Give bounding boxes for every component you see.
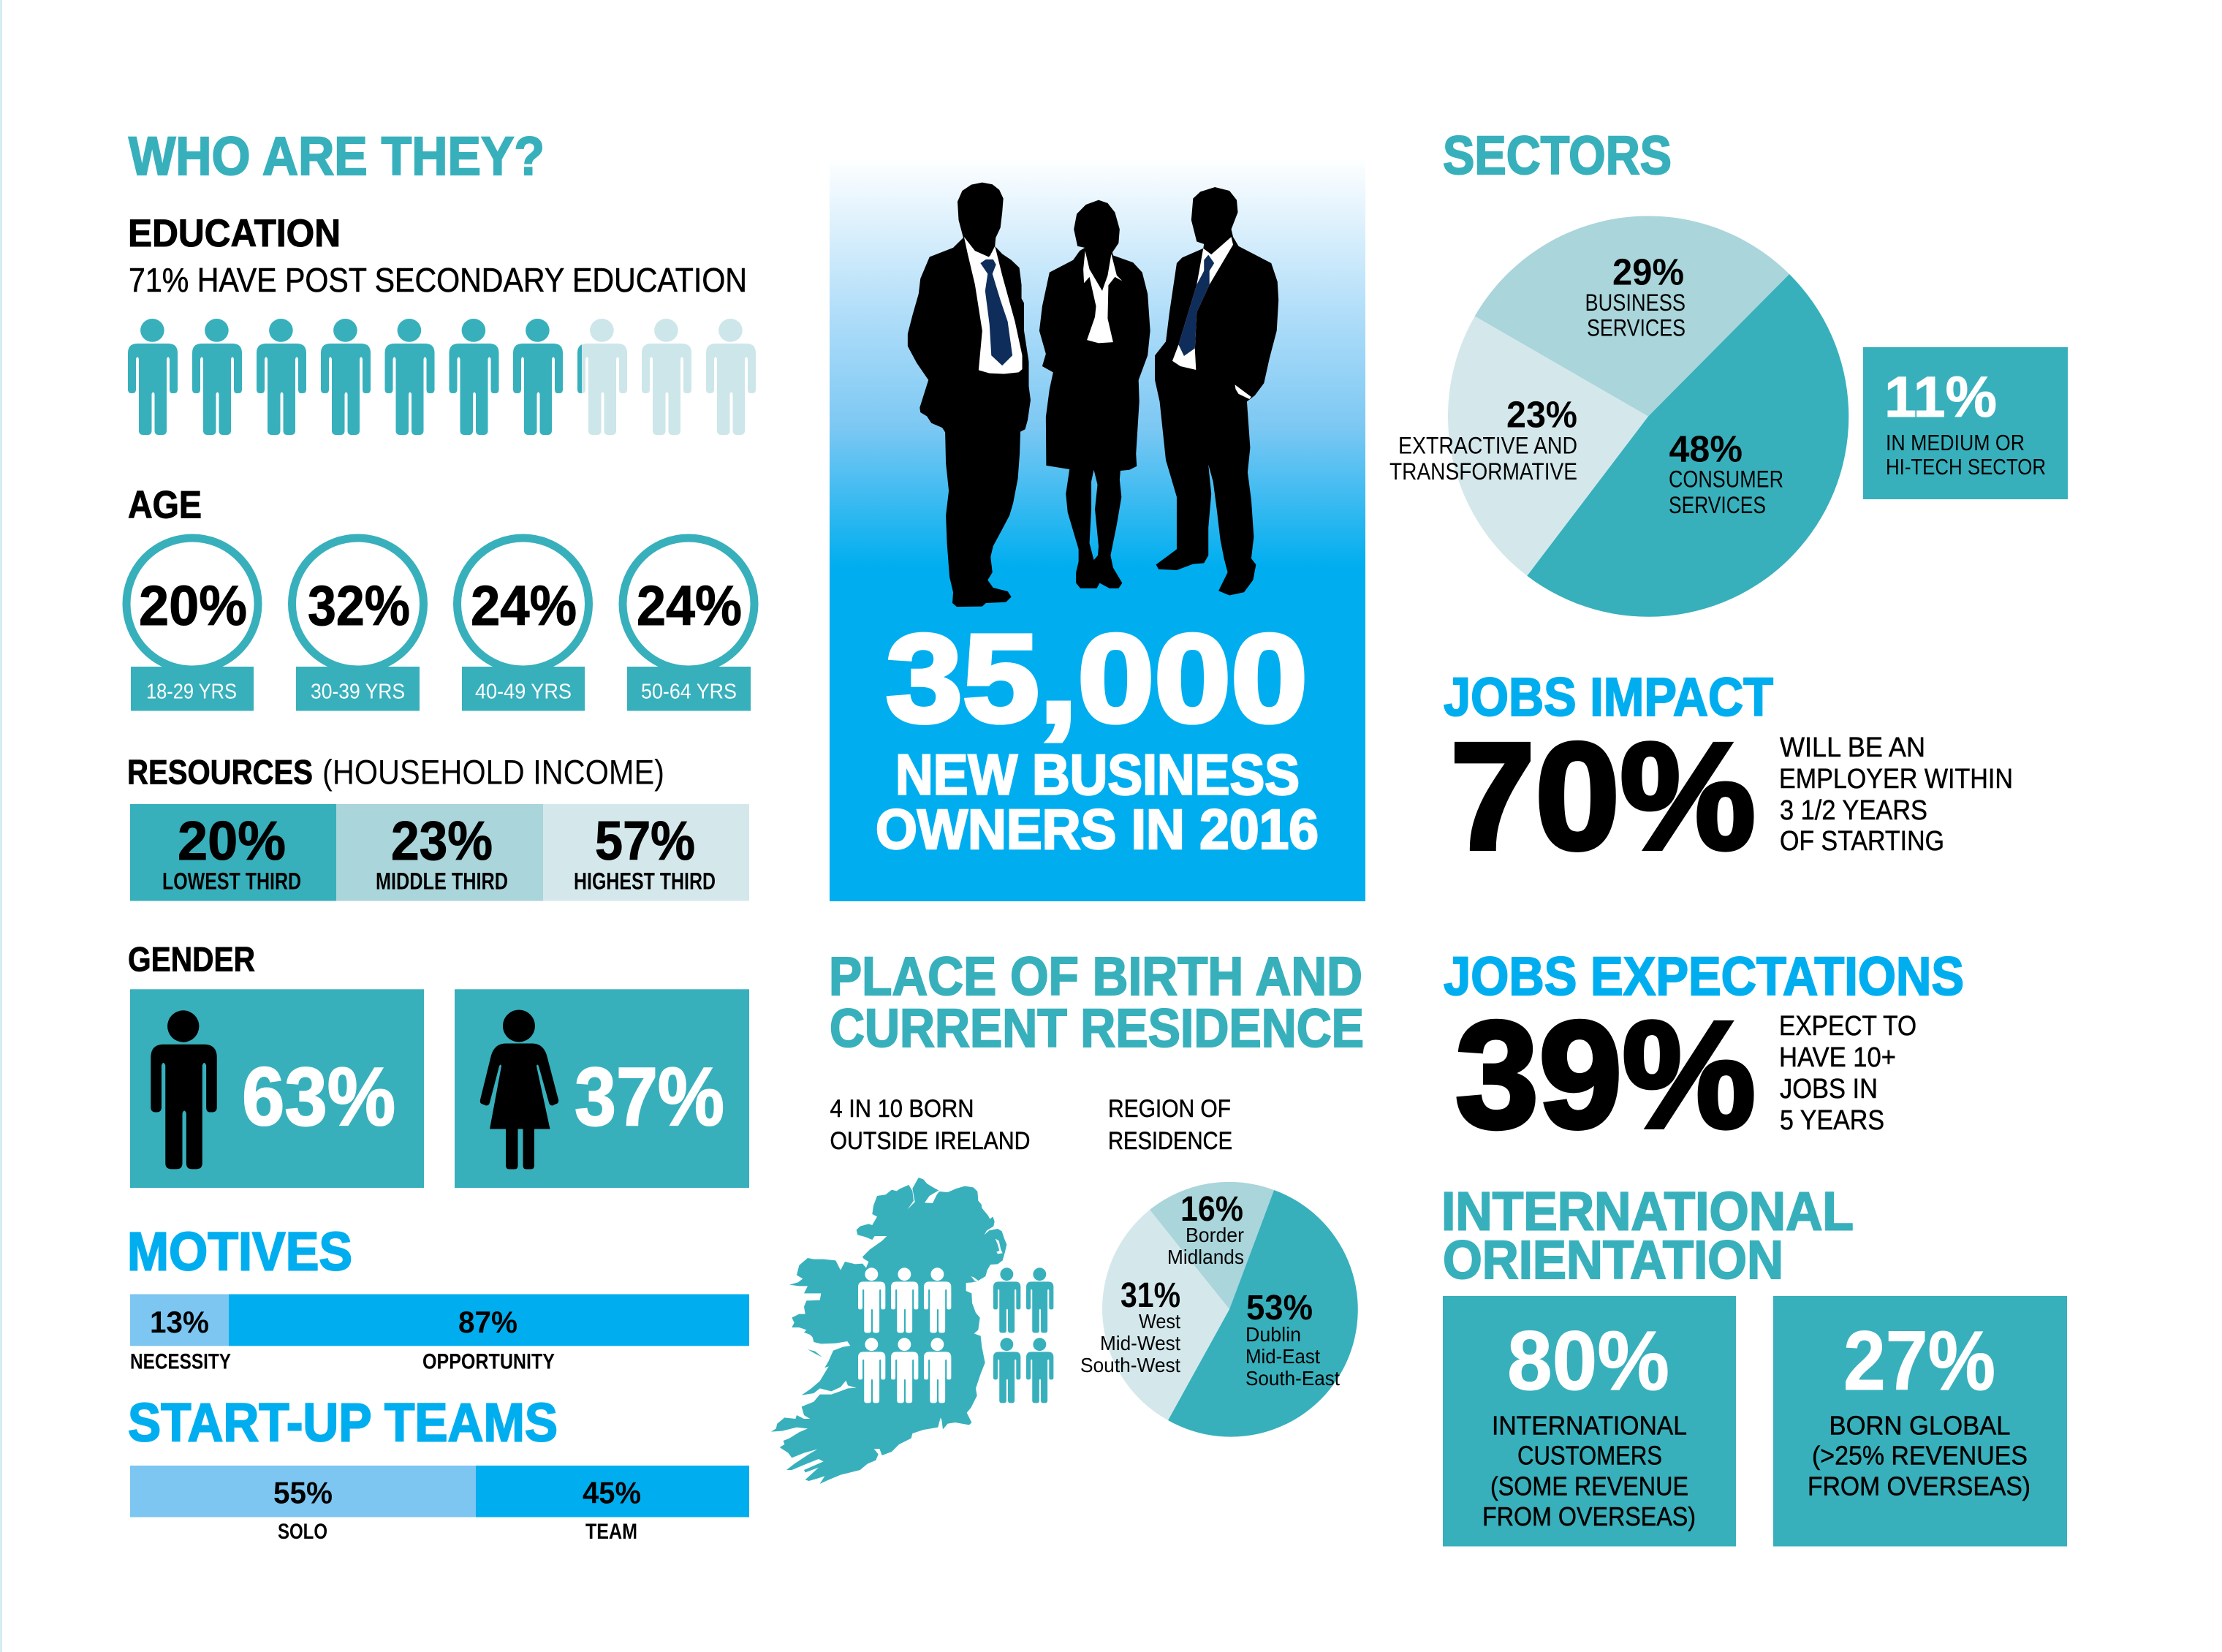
heading: start-up teams: START-UP TEAMS (128, 1392, 558, 1453)
heading: orientation: ORIENTATION (1443, 1229, 1783, 1290)
bar: team: TEAM (585, 1520, 637, 1544)
text: expect to have: JOBS IN (1780, 1074, 1878, 1105)
chart: sectors pie (1389, 216, 1848, 617)
age group 18-29: 18-29 YRS (146, 680, 237, 703)
label: extractive and transformative: TRANSFORMATIVE (1389, 458, 1577, 485)
bar: solo: 55% (273, 1475, 333, 1510)
text: employer within (1779, 732, 2013, 857)
callout: medium or hi-tech: IN MEDIUM OR (1886, 430, 2025, 455)
card: international customers: (SOME REVENUE (1490, 1471, 1688, 1501)
label: 16 percent (1167, 1190, 1244, 1268)
bar: team (476, 1466, 749, 1544)
label: consumer services (1669, 428, 1783, 518)
text: region of residence: RESIDENCE (1108, 1127, 1232, 1155)
panel: age (126, 484, 754, 711)
label: consumer services: SERVICES (1669, 492, 1766, 518)
icons: people born in ireland (858, 1268, 951, 1403)
card: international customers: CUSTOMERS (1517, 1440, 1662, 1471)
heading: resources: RESOURCES (127, 753, 313, 791)
text: expect to have: 5 YEARS (1780, 1105, 1884, 1136)
segment: highest third (543, 804, 749, 901)
illustration: three business people (908, 183, 1278, 607)
callout: medium or hi-tech: HI-TECH SECTOR (1886, 454, 2046, 480)
panel: resources (127, 753, 749, 901)
age group 50-64: 24% (637, 575, 742, 637)
text: region of residence (1108, 1095, 1232, 1155)
heading: household income: (HOUSEHOLD INCOME) (322, 753, 664, 791)
text: employer within: WILL BE AN (1780, 732, 1925, 763)
segment: middle third (336, 804, 543, 901)
label: 31 percent: South-West (1080, 1354, 1180, 1376)
icon: man (151, 1010, 217, 1169)
text: region of residence: REGION OF (1108, 1095, 1231, 1123)
panel: hero (830, 157, 1365, 901)
panel: education (128, 212, 756, 435)
text: employer within: EMPLOYER WITHIN (1779, 764, 2013, 795)
panel: place of birth and residence (771, 946, 1364, 1484)
icons: ten people, 71 percent filled (128, 319, 756, 435)
text: born outside: OUTSIDE IRELAND (830, 1127, 1031, 1155)
card: born global: 27% (1843, 1314, 1995, 1408)
text: born outside (830, 1095, 1031, 1155)
age group 50-64: 50-64 YRS (641, 680, 737, 703)
label: business services: 29% (1612, 251, 1684, 292)
figure: right man (1155, 187, 1278, 596)
card: female: 37% (575, 1050, 724, 1143)
bar: necessity: NECESSITY (130, 1349, 231, 1374)
segment: lowest third (130, 804, 336, 901)
label: business services: SERVICES (1587, 314, 1686, 341)
panel: jobs expectations (1444, 946, 1964, 1160)
segment: middle third: MIDDLE THIRD (376, 868, 508, 895)
card: born global: (>25% REVENUES (1812, 1440, 2028, 1471)
text: born outside: 4 IN 10 BORN (830, 1095, 974, 1123)
label: 53 percent: Dublin (1245, 1323, 1301, 1346)
heading: sectors: SECTORS (1443, 125, 1672, 186)
label: business services (1585, 251, 1686, 341)
big number: 70 percent: 70% (1450, 712, 1756, 882)
segment: lowest third: LOWEST THIRD (162, 868, 301, 895)
label: 53 percent: South-East (1245, 1367, 1340, 1390)
label: consumer services: 48% (1669, 428, 1743, 469)
age group 40-49: 24% (471, 575, 577, 637)
age group 18-29: 20% (139, 575, 247, 637)
text: employer within: OF STARTING (1780, 826, 1944, 857)
bar: solo: SOLO (278, 1520, 327, 1544)
age group 40-49 (458, 538, 589, 711)
segment: highest third: HIGHEST THIRD (574, 868, 716, 895)
bar: solo (130, 1466, 476, 1544)
card: born global (1773, 1296, 2067, 1547)
label: extractive and transformative: 23% (1506, 393, 1577, 436)
callout: medium or hi-tech: 11% (1884, 364, 1997, 429)
text: employer within: 3 1/2 YEARS (1780, 795, 1927, 826)
bar: opportunity: OPPORTUNITY (422, 1349, 555, 1374)
label: extractive and transformative: EXTRACTIVE AND (1398, 433, 1577, 459)
heading: motives: MOTIVES (127, 1221, 352, 1282)
card: international customers: FROM OVERSEAS) (1482, 1501, 1696, 1531)
card: born global: FROM OVERSEAS) (1808, 1471, 2030, 1501)
segment: highest third: 57% (595, 810, 695, 871)
panel: motives (127, 1221, 749, 1374)
bar: team: 45% (583, 1475, 641, 1510)
callout: medium or hi-tech (1863, 347, 2068, 499)
bar: opportunity (229, 1294, 749, 1374)
label: 16 percent: Midlands (1167, 1246, 1244, 1268)
title: who are they: WHO ARE THEY? (129, 126, 545, 186)
big number: 35,000 (886, 609, 1308, 749)
card: international customers: 80% (1507, 1314, 1669, 1408)
text: expect to have: HAVE 10+ (1779, 1042, 1896, 1073)
label: business services: BUSINESS (1585, 289, 1686, 316)
age group 18-29 (126, 538, 258, 711)
card: male: 63% (242, 1050, 395, 1143)
figure: left man (908, 183, 1031, 607)
bar: necessity: 13% (150, 1305, 209, 1339)
segment: middle third: 23% (391, 810, 493, 871)
label: 53 percent: Mid-East (1245, 1345, 1320, 1368)
panel: jobs impact (1444, 667, 2013, 882)
segment: lowest third: 20% (178, 810, 286, 871)
heading: current residence: CURRENT RESIDENCE (830, 998, 1364, 1058)
heading: international: INTERNATIONAL (1441, 1181, 1854, 1241)
label: 53 percent: 53% (1246, 1289, 1313, 1327)
panel: international orientation (1441, 1181, 2067, 1547)
label: extractive and transformative (1389, 393, 1577, 485)
hero caption line 1: NEW BUSINESS (895, 743, 1300, 807)
panel: gender (128, 940, 749, 1188)
age group 30-39: 30-39 YRS (311, 680, 405, 703)
icons: people born outside ireland (993, 1268, 1053, 1403)
label: 31 percent: Mid-West (1100, 1332, 1180, 1354)
heading: jobs expectations: JOBS EXPECTATIONS (1444, 946, 1964, 1007)
bar: necessity (130, 1294, 231, 1374)
figure: woman (1039, 200, 1150, 588)
label: consumer services: CONSUMER (1669, 466, 1783, 493)
big number: 39 percent: 39% (1455, 990, 1756, 1160)
chart: region of residence pie (1080, 1182, 1358, 1437)
age group 40-49: 40-49 YRS (475, 680, 572, 703)
heading: gender: GENDER (128, 940, 255, 978)
card: international customers (1443, 1296, 1736, 1547)
panel: start-up teams (128, 1392, 749, 1544)
icon: woman (480, 1010, 558, 1170)
map: ireland (771, 1178, 1006, 1484)
heading: education: EDUCATION (128, 212, 341, 255)
age group 50-64 (623, 538, 754, 711)
heading: age: AGE (128, 484, 202, 526)
label: 31 percent: 31% (1121, 1276, 1180, 1315)
heading: place of birth: PLACE OF BIRTH AND (829, 946, 1362, 1007)
card: international customers: INTERNATIONAL (1492, 1411, 1687, 1440)
panel: sectors (1389, 125, 2068, 617)
hero caption line 2: OWNERS IN 2016 (876, 798, 1319, 861)
card: born global: BORN GLOBAL (1829, 1411, 2010, 1440)
text: expect to have: EXPECT TO (1779, 1011, 1916, 1042)
age group 30-39: 32% (308, 575, 410, 637)
text: post secondary: 71% HAVE POST SECONDARY EDUCATION (129, 261, 747, 299)
heading: jobs impact: JOBS IMPACT (1444, 667, 1773, 727)
label: 16 percent: Border (1186, 1224, 1244, 1246)
label: 31 percent: West (1139, 1310, 1180, 1333)
card: male (130, 989, 424, 1188)
card: female (455, 989, 749, 1188)
age group 30-39 (292, 538, 424, 711)
label: 53 percent (1245, 1289, 1340, 1390)
label: 31 percent (1080, 1276, 1180, 1376)
bar: opportunity: 87% (458, 1305, 517, 1339)
label: 16 percent: 16% (1180, 1190, 1243, 1229)
text: expect to have (1779, 1011, 1916, 1136)
